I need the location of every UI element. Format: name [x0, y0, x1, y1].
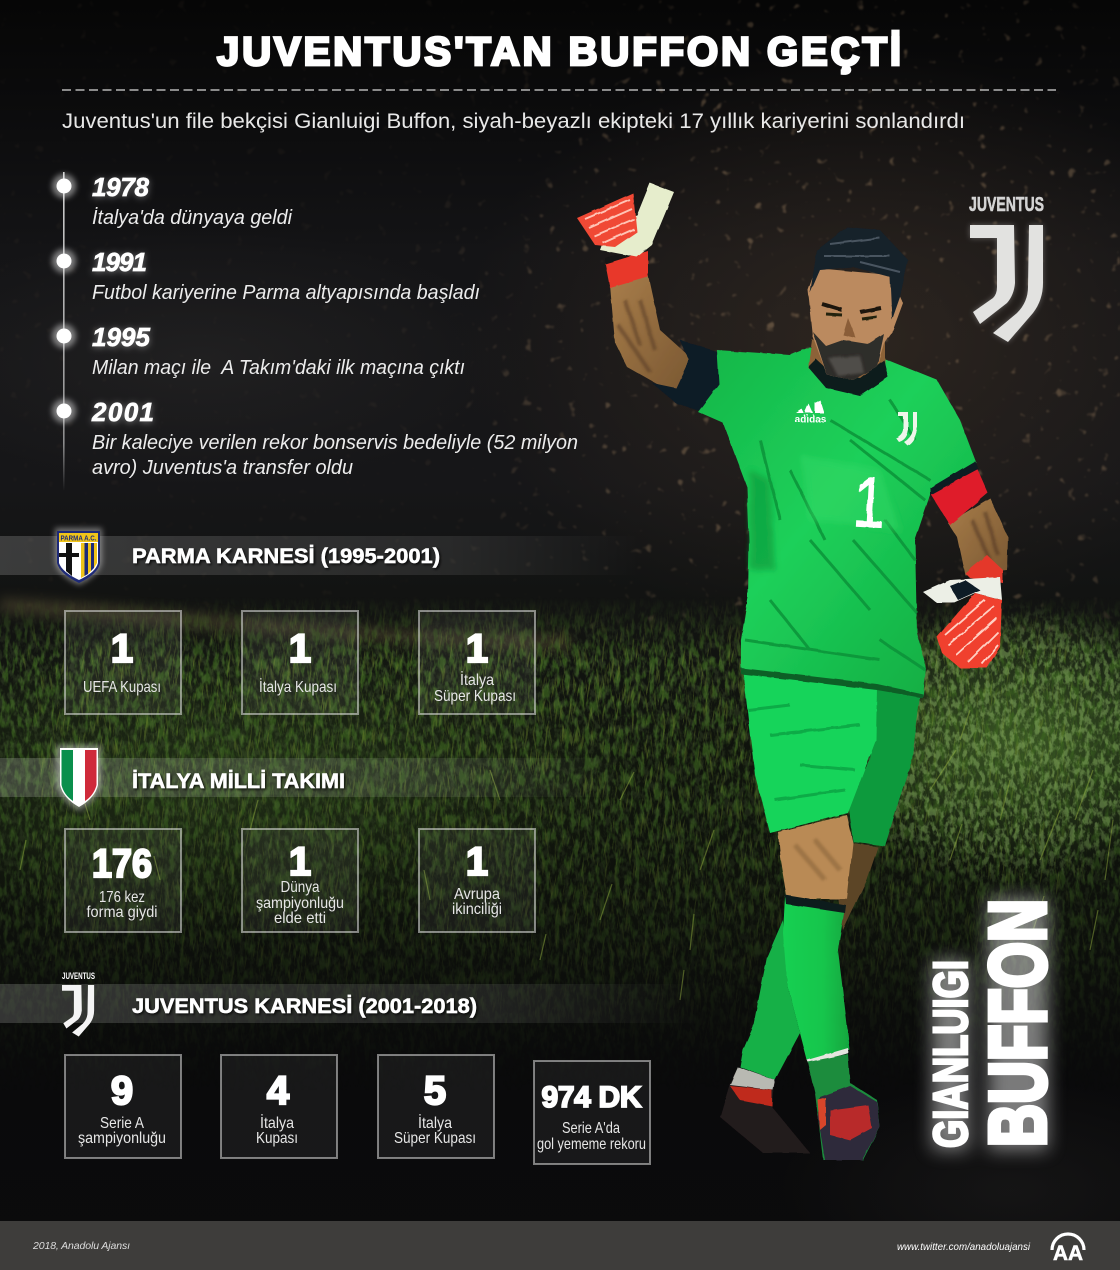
Juventus stat: 974 minutes record	[534, 1061, 650, 1164]
Italy stat: 176 caps: 176 kez	[99, 889, 145, 906]
Juventus stat: Serie A	[65, 1055, 181, 1158]
twitter url: www.twitter.com/anadoluajansi	[897, 1241, 1031, 1253]
timeline entry: 2001	[52, 397, 578, 479]
icon: Italian scudetto shield	[56, 745, 101, 811]
section band: Parma	[0, 536, 640, 575]
timeline entry: 1978	[52, 172, 293, 229]
Italy stat: 176 caps: forma giydi	[86, 904, 158, 921]
timeline	[52, 172, 578, 491]
Juventus stat: 974 minutes record: 974 DK	[542, 1081, 642, 1114]
timeline entry: 2001: 2001	[91, 397, 154, 427]
Juventus stat: İtalya Süper Kupası: İtalya	[418, 1113, 452, 1132]
timeline entry: 1978: İtalya'da dünyaya geldi	[92, 207, 293, 229]
back boot	[720, 1067, 810, 1153]
Italy stat: World Cup: elde etti	[274, 910, 326, 927]
Juventus stat: Serie A: 9	[111, 1069, 133, 1113]
shorts	[848, 687, 920, 846]
footer bar	[0, 1221, 1120, 1270]
right forearm	[948, 498, 1008, 575]
head	[808, 227, 908, 380]
Juventus stat: İtalya Süper Kupası	[378, 1055, 494, 1158]
Italy stat: Euro runner-up: Avrupa	[454, 886, 500, 903]
jersey crest	[896, 412, 917, 446]
neck	[808, 340, 885, 383]
name: GIANLUIGI: GIANLUIGI	[925, 960, 978, 1148]
Italy stat: World Cup: Dünya	[280, 879, 320, 896]
timeline entry: 1991	[52, 247, 480, 304]
Juventus stat: İtalya Süper Kupası: Süper Kupası	[394, 1130, 476, 1147]
timeline entry: 1991: Futbol kariyerine Parma altyapısında başladı	[92, 282, 480, 304]
Juventus stat: İtalya Süper Kupası: 5	[424, 1069, 446, 1113]
subtitle: Juventus'un file bekçisi Gianluigi Buffon, siyah-beyazlı ekipteki 17 yıllık kariyerini sonlandırdı	[62, 109, 965, 133]
Parma stat: İtalya Süper Kupası: 1	[466, 627, 488, 671]
wristband	[605, 250, 648, 288]
Italy stat: 176 caps	[65, 829, 181, 932]
front sock	[783, 897, 850, 1060]
player: Gianluigi Buffon in green kit	[577, 183, 1008, 1160]
icon: small Juventus logo	[62, 971, 95, 1036]
name: BUFFON: BUFFON	[973, 899, 1062, 1147]
jersey number: 1	[851, 462, 887, 544]
section band: Italy	[0, 758, 620, 797]
Juventus stat: İtalya Kupası	[221, 1055, 337, 1158]
jersey	[698, 347, 976, 697]
Juventus logo top right: JUVENTUS	[969, 194, 1044, 216]
collar	[808, 359, 888, 396]
back sock	[740, 920, 800, 1080]
name lettering: Gianluigi Buffon	[925, 898, 1062, 1150]
Italy stat: World Cup: şampiyonluğu	[256, 895, 344, 912]
back leg and thigh	[838, 843, 878, 930]
Juventus stat: İtalya Kupası: İtalya	[260, 1113, 294, 1132]
adidas logo: adidas	[794, 414, 826, 425]
icon: Parma shield: PARMA A.C.	[60, 534, 96, 542]
timeline entry: 2001: Bir kaleciye verilen rekor bonservis bedeliyle (52 milyon	[92, 432, 578, 454]
Parma stat: UEFA Kupası	[65, 611, 181, 714]
lower glove	[923, 555, 1003, 668]
timeline entry: 1991: 1991	[92, 247, 147, 277]
section band: Juventus	[0, 984, 700, 1023]
black sleeve band	[652, 340, 719, 411]
timeline entry: 1995: 1995	[92, 322, 151, 352]
Italy stat: Euro runner-up	[419, 829, 535, 932]
timeline entry: 1978: 1978	[92, 172, 150, 202]
Juventus stat: Serie A: Serie A	[100, 1115, 144, 1132]
raised glove	[577, 183, 674, 257]
Italy stat: World Cup	[242, 829, 358, 932]
Italy stat: 176 caps: 176	[92, 842, 152, 886]
icon: Parma shield	[55, 528, 102, 585]
Parma stat: İtalya Kupası: 1	[289, 627, 311, 671]
front boot	[808, 1054, 880, 1160]
heading: Juventus: JUVENTUS KARNESİ (2001-2018)	[132, 994, 477, 1018]
Parma stat: İtalya Süper Kupası: İtalya	[460, 670, 494, 689]
Parma stat: İtalya Kupası	[242, 611, 358, 714]
raised arm	[610, 275, 690, 390]
timeline entry: 1995	[52, 322, 465, 379]
Italy stat: Euro runner-up: ikinciliği	[452, 901, 502, 918]
timeline entry: 1995: Milan maçı ile A Takım'daki ilk maçına çıktı	[92, 357, 465, 379]
Juventus stat: 974 minutes record: gol yememe rekoru	[537, 1136, 646, 1153]
Italy stat: World Cup: 1	[289, 840, 311, 884]
captain armband	[930, 468, 988, 525]
Parma stat: İtalya Süper Kupası	[419, 611, 535, 714]
Juventus stat: 974 minutes record: Serie A'da	[562, 1120, 620, 1137]
dashed divider	[62, 89, 1056, 91]
Juventus stat: İtalya Kupası: 4	[267, 1069, 290, 1113]
timeline entry: 2001: avro) Juventus'a transfer oldu	[92, 457, 353, 479]
Parma stat: İtalya Kupası: İtalya Kupası	[259, 677, 337, 696]
Parma stat: UEFA Kupası: 1	[111, 627, 133, 671]
heading: Parma: PARMA KARNESİ (1995-2001)	[132, 544, 440, 568]
adidas logo	[794, 400, 826, 425]
Juventus logo top right	[969, 194, 1044, 342]
icon: small Juventus logo: JUVENTUS	[62, 971, 95, 982]
title: JUVENTUS'TAN BUFFON GEÇTİ	[217, 30, 901, 74]
name glow	[932, 898, 1048, 1150]
Juventus stat: İtalya Kupası: Kupası	[256, 1130, 298, 1147]
copyright: 2018, Anadolu Ajansı	[32, 1240, 130, 1252]
Parma stat: İtalya Süper Kupası: Süper Kupası	[434, 688, 516, 705]
icon: Anadolu Agency logo: AA	[1053, 1242, 1083, 1265]
Parma stat: UEFA Kupası: UEFA Kupası	[83, 679, 161, 696]
heading: Italy: İTALYA MİLLİ TAKIMI	[132, 769, 345, 793]
Juventus stat: Serie A: şampiyonluğu	[78, 1130, 166, 1147]
Italy stat: Euro runner-up: 1	[466, 840, 488, 884]
